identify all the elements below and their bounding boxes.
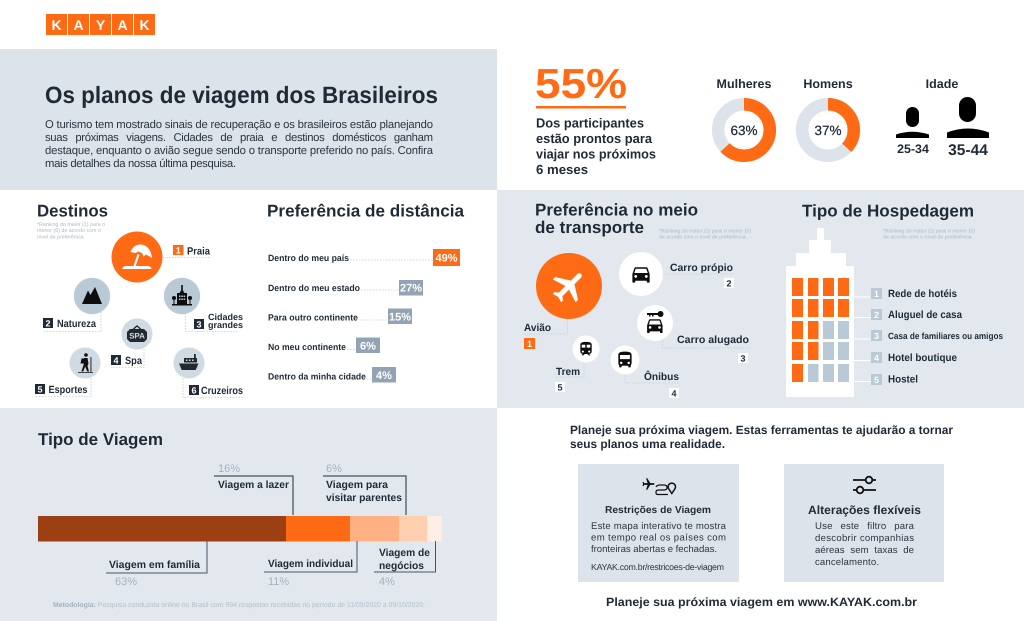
callout: Viagem individual 11% [264,541,357,588]
transport 3: Carro alugado: Carro alugado [677,334,749,346]
rank 4: Hotel boutique: 4 [874,353,879,363]
panel: key statistics [535,60,989,177]
card: Restrições de Viagem: fronteiras abertas e fechadas. [591,544,717,555]
panel: preferência de distância [267,202,465,382]
callout: Viagem a lazer 16% [214,463,293,515]
destination 5: Esportes [35,348,100,396]
transport 2: Carro própio: 2 [726,278,732,288]
card: Alterações flexíveis: Alterações flexíveis [808,503,921,517]
age icons: Idade [926,77,958,91]
panel: tools [570,423,953,609]
card: Restrições de Viagem: KAYAK.com.br/restricoes-de-viagem [591,562,724,572]
row: Dentro do meu país 49% [268,249,460,266]
destination 6: Cruzeiros [174,348,243,398]
icon: sliders [853,477,876,493]
methodology note: Metodologia: Pesquisa conduzida online no Brasil com 994 respostas recebidas no período de 11/09/2020 a 09/10/2020. [53,601,425,609]
row: Para outro continente 15% [268,308,412,324]
transport 1: Avião: Avião [524,322,551,334]
intro heading [570,423,953,451]
panel: tipo de hospedagem [776,190,1024,408]
card: Restrições de Viagem: Restrições de Viagem [605,505,711,516]
destination 4: Spa: 4 [113,355,119,365]
panel: destinos [35,202,243,398]
destination 1: Praia [112,232,210,282]
destination 4: Spa [111,318,152,368]
transport 2: Carro própio [619,252,734,296]
heading: Preferência de distância [267,202,465,220]
callout: Viagem em família 63%: Viagem em família [109,559,200,571]
destination 3: Cidades grandes [164,278,243,332]
row: Dentro da minha cidade 4% [268,367,396,382]
logo: KAYAK: K [51,17,62,33]
row: Dentro da minha cidade 4%: 4% [376,370,392,382]
row: No meu continente 6%: 6% [360,340,376,352]
transport 5: Trem: Trem [556,366,580,378]
ranking note [659,228,751,240]
rank 4: Hotel boutique [854,352,957,364]
transport 4: Ônibus [610,346,680,398]
age icons [896,77,989,159]
heading: Destinos [37,202,108,220]
ranking note: nível de preferência. [37,234,85,240]
heading [535,200,698,237]
heading: Preferência no meio [535,200,698,220]
callout: Viagem a lazer 16%: Viagem a lazer [218,479,289,491]
destination 5: Esportes: Esportes [48,384,88,396]
ranking note: de acordo com o nível de preferência. [659,234,747,240]
destination 4: Spa: SPA [129,332,145,340]
donut: Homens 37%: 37% [814,123,842,138]
callout: Viagem individual 11%: 11% [268,576,289,588]
transport 4: Ônibus: Ônibus [644,370,679,383]
heading: de transporte [535,218,644,237]
callout: Viagem de negócios 4%: negócios [379,560,424,572]
row: Dentro do meu estado 27%: 27% [400,282,422,294]
callout: Viagem para visitar parentes 6%: visitar parentes [326,492,402,504]
heading: Tipo de Hospedagem [802,202,974,220]
card: Alterações flexíveis: Use este filtro para [815,521,915,532]
age icons: 25-34 [897,142,929,156]
donut: Homens 37%: Homens [803,77,853,91]
panel: introduction [0,49,497,190]
rank 1: Rede de hotéis: 1 [874,289,879,299]
rank 2: Aluguel de casa: Aluguel de casa [888,309,962,321]
row: No meu continente 6% [268,338,380,353]
row: Dentro do meu estado 27% [268,280,423,296]
logo: KAYAK [46,14,155,35]
transport 5: Trem [555,336,600,392]
card: Alterações flexíveis: aéreas sem taxas de [815,545,914,556]
rank 5: Hostel [854,374,918,386]
destination 3: Cidades grandes: 3 [196,319,202,329]
rank 4: Hotel boutique: Hotel boutique [888,352,957,364]
rank 1: Rede de hotéis [854,288,957,300]
ranking note: *Ranking do maior (1) para o menor (5) [659,228,751,234]
intro text: destaque, enquanto o avião segue sendo o transporte preferido no país. Confira [45,145,434,157]
callout: Viagem para visitar parentes 6%: 6% [326,463,342,475]
rank 1: Rede de hotéis: Rede de hotéis [888,288,957,300]
panel: preferência no meio de transporte [497,190,776,408]
logo: KAYAK: Y [96,17,106,33]
callout: Viagem de negócios 4%: 4% [379,576,395,588]
transport 3: Carro alugado: 3 [740,353,746,363]
call to action: Planeje sua próxima viagem em www.KAYAK.com.br [606,595,917,609]
rank 3: Casa de familiares ou amigos: 3 [874,331,879,341]
heading: Tipo de Viagem [38,430,163,449]
intro text [45,119,434,170]
stacked bar [38,516,442,542]
destination 2: Natureza: Natureza [57,318,96,330]
transport 1: Avião: 1 [527,339,532,349]
card: Alterações flexíveis [784,464,944,582]
logo: KAYAK: A [73,17,84,33]
transport 4: Ônibus: 4 [671,388,677,398]
destination 6: Cruzeiros: Cruzeiros [201,385,243,397]
row: Dentro do meu país 49%: 49% [435,252,458,264]
destination 3: Cidades grandes: Cidades [208,312,243,322]
destination 4: Spa: Spa [125,355,142,367]
intro text: mais detalhes da nossa última pesquisa. [45,158,236,170]
transport 5: Trem: 5 [557,382,563,392]
row: Dentro da minha cidade 4%: Dentro da minha cidade [268,372,366,382]
card: Alterações flexíveis: cancelamento. [815,557,879,568]
callout: Viagem de negócios 4% [374,541,436,588]
card: Restrições de Viagem [578,464,739,582]
ranking note: *Ranking do maior (1) para o [37,222,105,228]
rank 3: Casa de familiares ou amigos: Casa de familiares ou amigos [888,331,1003,341]
destination 3: Cidades grandes: grandes [208,320,243,330]
icon: plane with route and pin [642,478,675,494]
ranking note: de acordo com o nível de preferência. [883,234,973,240]
card: Restrições de Viagem: Este mapa interativo te mostra [591,521,727,532]
stat: 55%: viajar nos próximos [536,146,656,162]
rank 2: Aluguel de casa: 2 [874,310,879,320]
ranking note [883,228,975,240]
panel: tipo de viagem [0,408,497,621]
age icons: 35-44 [948,142,988,159]
donut: Mulheres 63% [717,77,771,156]
row: Dentro do meu estado 27%: Dentro do meu estado [268,283,360,293]
callout: Viagem para visitar parentes 6% [323,463,406,515]
stat: 55%: Dos participantes [536,116,644,130]
rank 5: Hostel: 5 [874,375,879,385]
transport 1: Avião [524,253,602,349]
title: Os planos de viagem dos Brasileiros [45,83,438,109]
intro text: suas próximas viagens. Cidades de praia e destinos domésticos ganham [45,132,433,144]
callout: Viagem individual 11%: Viagem individual [268,558,353,570]
rank 3: Casa de familiares ou amigos [854,330,1003,341]
destination 2: Natureza [43,278,110,332]
transport 3: Carro alugado [637,305,751,363]
rank 2: Aluguel de casa [854,309,962,321]
intro heading: seus planos uma realidade. [570,437,725,451]
donut: Homens 37% [802,77,854,156]
card: Restrições de Viagem: em tempo real os países com [591,532,726,544]
donut: Mulheres 63%: Mulheres [717,77,771,91]
row: Para outro continente 15%: 15% [389,312,411,324]
callout: Viagem de negócios 4%: Viagem de [379,547,430,559]
ranking note [37,222,105,240]
transport 2: Carro própio: Carro própio [670,262,733,274]
intro heading: Planeje sua próxima viagem. Estas ferramentas te ajudarão a tornar [570,423,953,437]
donut: Mulheres 63%: 63% [730,123,758,138]
destination 2: Natureza: 2 [45,318,51,328]
row: No meu continente 6%: No meu continente [268,342,346,352]
stat: 55%: 6 meses [536,162,588,177]
stat: 55%: 55% [535,60,627,107]
destination 5: Esportes: 5 [37,384,43,394]
stat: 55% [535,60,656,177]
destination 1: Praia: 1 [176,245,181,255]
ranking note: *Ranking do maior (1) para o menor (5) [883,228,975,234]
logo: KAYAK: K [139,17,150,33]
stat: 55%: estão prontos para [536,131,653,146]
card: Alterações flexíveis: descobrir companhias [815,533,914,544]
callout: Viagem em família 63%: 63% [115,576,137,588]
destination 6: Cruzeiros: 6 [191,385,197,395]
row: Para outro continente 15%: Para outro continente [268,312,358,322]
ranking note: menor (6) de acordo com o [37,228,101,234]
logo: KAYAK: A [117,17,128,33]
destination 1: Praia: Praia [187,246,210,258]
callout: Viagem para visitar parentes 6%: Viagem para [326,479,388,491]
rank 5: Hostel: Hostel [888,374,918,386]
building icon [786,228,854,397]
callout: Viagem em família 63% [106,541,207,588]
row: Dentro do meu país 49%: Dentro do meu país [268,253,349,263]
intro text: O turismo tem mostrado sinais de recuperação e os brasileiros estão planejando [45,119,433,131]
callout: Viagem a lazer 16%: 16% [218,463,240,475]
